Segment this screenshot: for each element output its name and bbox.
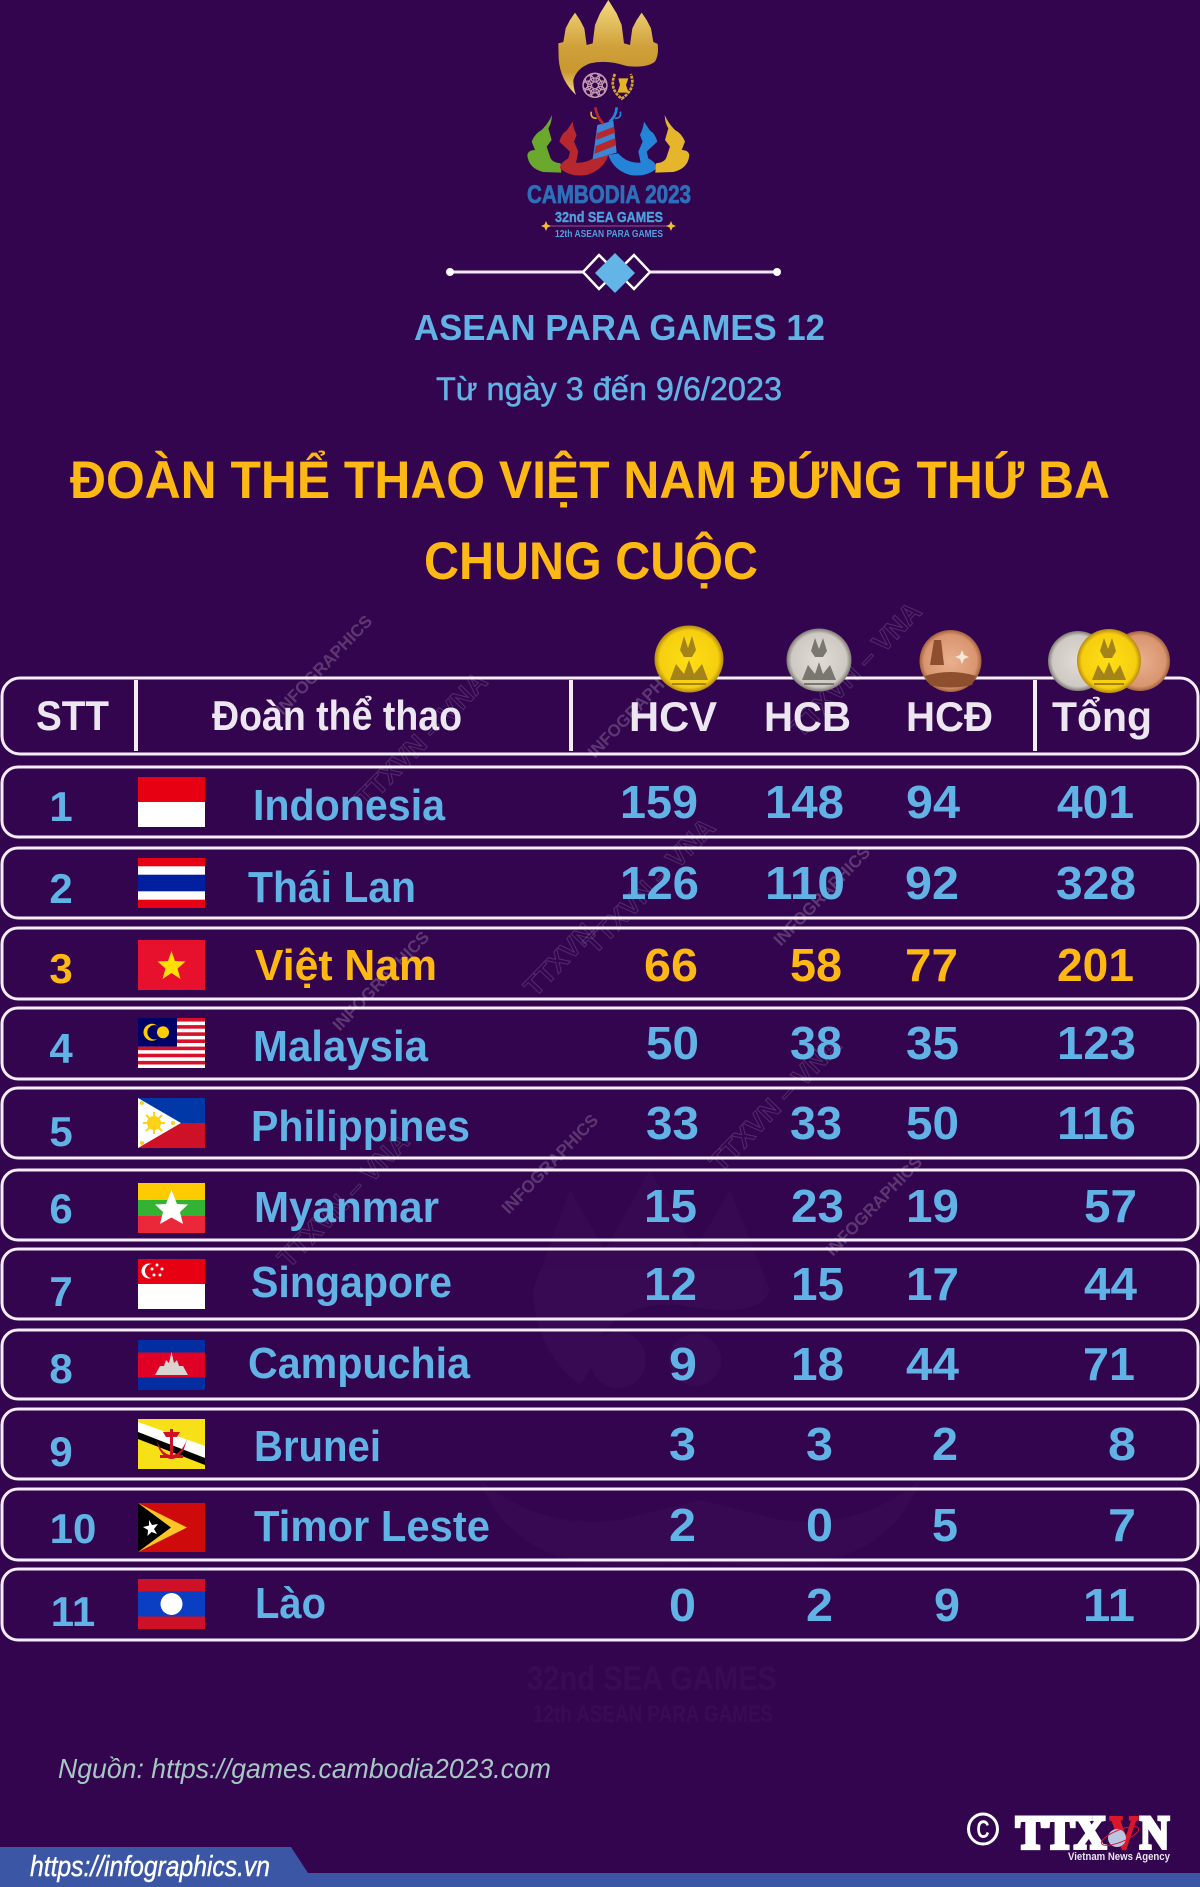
row 1: Indonesia: Indonesia xyxy=(253,781,445,830)
row 2: Thái Lan: 92 xyxy=(905,857,959,909)
watermark: agency marks: TTXVN – VNA xyxy=(578,812,721,959)
row 9: Brunei: Brunei xyxy=(254,1422,381,1471)
event logo xyxy=(527,0,691,240)
title xyxy=(70,449,1110,591)
source note: Nguồn: https://games.cambodia2023.com xyxy=(58,1753,551,1784)
title: ĐOÀN THỂ THAO VIỆT NAM ĐỨNG THỨ BA xyxy=(70,449,1110,510)
row 10: Timor Leste: 2 xyxy=(669,1499,696,1551)
row 1: Indonesia: 148 xyxy=(765,776,844,828)
row 5: Philippines: 50 xyxy=(906,1097,959,1149)
watermark: agency marks: INFOGRAPHICS xyxy=(329,928,433,1035)
row 10: Timor Leste xyxy=(2,1489,1198,1560)
flag: Thailand xyxy=(138,858,205,908)
row 9: Brunei: 2 xyxy=(932,1418,958,1470)
row 6: Myanmar: 15 xyxy=(644,1180,697,1232)
row 6: Myanmar: 19 xyxy=(906,1180,959,1232)
row 1: Indonesia: 401 xyxy=(1057,776,1134,828)
row 1: Indonesia xyxy=(2,767,1198,837)
watermark: faint games text: 32nd SEA GAMES xyxy=(527,1660,777,1698)
row 9: Brunei: 3 xyxy=(669,1418,696,1470)
icon: rosette emblem xyxy=(583,73,607,97)
row 5: Philippines: Philippines xyxy=(251,1102,470,1151)
row 5: Philippines xyxy=(2,1088,1198,1158)
watermark: faint games logo xyxy=(480,1170,920,1566)
watermark: agency marks: TTXVN – VNA xyxy=(704,1030,847,1177)
row 8: Campuchia xyxy=(2,1330,1198,1399)
logo divider with stars xyxy=(541,221,676,231)
watermark: agency marks: TTXVN xyxy=(518,917,601,1002)
row 6: Myanmar: 6 xyxy=(49,1185,73,1232)
row 5: Philippines: 116 xyxy=(1057,1097,1136,1149)
icon: gold medal xyxy=(654,626,724,692)
row 3: Việt Nam highlighted: 3 xyxy=(49,945,73,992)
watermark: agency marks: INFOGRAPHICS xyxy=(498,1111,602,1218)
row 3: Việt Nam highlighted: 66 xyxy=(644,939,698,991)
icon: gold crown xyxy=(527,0,689,175)
ornamental divider xyxy=(446,253,781,293)
watermark: agency marks: TTXVN – VNA xyxy=(272,1126,415,1273)
row 1: Indonesia: 159 xyxy=(620,776,698,828)
watermark: agency marks: TTXVN – VNA xyxy=(784,596,927,743)
icon: combined medals xyxy=(1048,629,1170,693)
row 6: Myanmar: 57 xyxy=(1084,1180,1137,1232)
row 7: Singapore: 17 xyxy=(906,1258,959,1310)
row 4: Malaysia: 35 xyxy=(906,1017,959,1069)
logo text: 32nd SEA Games: 32nd SEA GAMES xyxy=(555,209,663,226)
row 11: Lào: 9 xyxy=(934,1579,960,1631)
row 2: Thái Lan: 126 xyxy=(620,857,699,909)
event name: ASEAN PARA GAMES 12 xyxy=(414,307,825,348)
flag: Myanmar xyxy=(138,1183,205,1233)
icon: central twisted scarf xyxy=(591,107,621,159)
flag: Vietnam xyxy=(138,940,205,990)
column heading: HCĐ: HCĐ xyxy=(906,693,993,740)
icon: silver medal xyxy=(786,628,852,692)
row 2: Thái Lan: 2 xyxy=(49,865,73,912)
row 6: Myanmar: Myanmar xyxy=(254,1183,439,1232)
column dividers xyxy=(134,680,1037,751)
flag: Malaysia xyxy=(138,1018,205,1068)
row 6: Myanmar: 23 xyxy=(791,1180,844,1232)
logo text: 12th ASEAN Para Games: 12th ASEAN PARA GAMES xyxy=(555,229,663,240)
row 2: Thái Lan: 110 xyxy=(765,857,845,909)
watermark: agency marks xyxy=(272,596,927,1273)
row 9: Brunei xyxy=(2,1409,1198,1479)
icon: blue naga xyxy=(608,122,657,175)
flag: Philippines xyxy=(138,1098,205,1148)
footer url: https://infographics.vn xyxy=(30,1851,270,1883)
flag: Brunei xyxy=(138,1419,205,1469)
row 11: Lào: Lào xyxy=(255,1579,326,1628)
row 6: Myanmar xyxy=(2,1170,1198,1240)
row 8: Campuchia: Campuchia xyxy=(248,1339,470,1388)
row 3: Việt Nam highlighted: 58 xyxy=(790,939,842,991)
column heading: HCB: HCB xyxy=(764,693,851,740)
watermark: faint games text: 12th ASEAN PARA GAMES xyxy=(533,1701,773,1728)
icon: globe xyxy=(1099,1823,1141,1849)
footer band xyxy=(0,1847,1200,1887)
column heading: HCV: HCV xyxy=(629,693,717,740)
table header xyxy=(2,678,1198,754)
copyright symbol xyxy=(968,1814,998,1844)
logo text: Cambodia 2023: CAMBODIA 2023 xyxy=(527,181,691,209)
row 5: Philippines: 33 xyxy=(646,1097,699,1149)
row 7: Singapore xyxy=(2,1249,1198,1319)
event dates: Từ ngày 3 đến 9/6/2023 xyxy=(436,371,782,407)
row 7: Singapore: Singapore xyxy=(251,1258,452,1307)
flag: Cambodia xyxy=(138,1340,205,1390)
row 8: Campuchia: 44 xyxy=(906,1338,959,1390)
title: CHUNG CUỘC xyxy=(424,530,758,591)
row 4: Malaysia: 123 xyxy=(1057,1017,1136,1069)
row 3: Việt Nam highlighted xyxy=(2,928,1198,999)
row 7: Singapore: 12 xyxy=(644,1258,697,1310)
column heading: delegation: Đoàn thể thao xyxy=(212,692,462,739)
row 11: Lào: 2 xyxy=(806,1579,833,1631)
row 7: Singapore: 7 xyxy=(49,1268,73,1315)
row 9: Brunei: 3 xyxy=(806,1418,833,1470)
watermark: agency marks: INFOGRAPHICS xyxy=(770,843,874,950)
row 11: Lào: 11 xyxy=(51,1588,95,1635)
row 10: Timor Leste: Timor Leste xyxy=(254,1502,490,1551)
row 11: Lào xyxy=(2,1569,1198,1640)
row 4: Malaysia: 4 xyxy=(49,1025,73,1072)
row 9: Brunei: 9 xyxy=(49,1428,73,1475)
row 2: Thái Lan xyxy=(2,848,1198,918)
flag: Timor Leste xyxy=(138,1503,205,1552)
flag: Laos xyxy=(138,1579,205,1629)
TTXVN logo xyxy=(1016,1807,1171,1863)
watermark: faint games text xyxy=(527,1660,777,1728)
row 10: Timor Leste: 7 xyxy=(1108,1499,1136,1551)
row 8: Campuchia: 18 xyxy=(791,1338,844,1390)
copyright symbol: C xyxy=(976,1816,990,1844)
row 8: Campuchia: 9 xyxy=(669,1338,697,1390)
row 3: Việt Nam highlighted: 77 xyxy=(905,939,958,991)
watermark: agency marks: TTXVN – VNA xyxy=(350,666,493,813)
row 5: Philippines: 5 xyxy=(49,1108,73,1155)
row 3: Việt Nam highlighted: 201 xyxy=(1057,939,1134,991)
watermark: agency marks: INFOGRAPHICS xyxy=(584,655,688,762)
watermark: agency marks: INFOGRAPHICS xyxy=(272,612,376,719)
row 11: Lào: 0 xyxy=(669,1579,696,1631)
flag: Indonesia xyxy=(138,777,205,827)
row 8: Campuchia: 8 xyxy=(49,1345,73,1392)
TTXVN logo: N xyxy=(1140,1807,1169,1859)
row 4: Malaysia: 50 xyxy=(646,1017,699,1069)
row 8: Campuchia: 71 xyxy=(1083,1338,1135,1390)
row 5: Philippines: 33 xyxy=(790,1097,842,1149)
icon: green naga xyxy=(527,115,561,173)
icon: red naga xyxy=(559,122,608,175)
watermark: agency marks: INFOGRAPHICS xyxy=(822,1153,926,1260)
column heading: STT: STT xyxy=(36,692,109,739)
row 1: Indonesia: 94 xyxy=(906,776,960,828)
TTXVN logo: TTX xyxy=(1016,1807,1106,1859)
row 10: Timor Leste: 5 xyxy=(932,1499,958,1551)
row 1: Indonesia: 1 xyxy=(49,783,73,830)
row 10: Timor Leste: 10 xyxy=(50,1505,96,1552)
icon: bronze medal xyxy=(920,630,982,692)
row 3: Việt Nam highlighted: Việt Nam xyxy=(255,941,437,990)
icon: asean wreath emblem xyxy=(613,74,632,99)
row 9: Brunei: 8 xyxy=(1108,1418,1136,1470)
column heading: total: Tổng xyxy=(1052,693,1152,740)
flag: Singapore xyxy=(138,1259,205,1309)
row 4: Malaysia: 38 xyxy=(790,1017,842,1069)
row 2: Thái Lan: Thái Lan xyxy=(248,863,416,912)
row 2: Thái Lan: 328 xyxy=(1056,857,1136,909)
TTXVN logo: V xyxy=(1110,1807,1138,1859)
row 4: Malaysia xyxy=(2,1008,1198,1079)
logo caption: Vietnam News Agency xyxy=(1068,1851,1171,1863)
icon: yellow naga xyxy=(655,115,689,173)
row 4: Malaysia: Malaysia xyxy=(253,1022,428,1071)
row 11: Lào: 11 xyxy=(1083,1579,1135,1631)
row 7: Singapore: 15 xyxy=(791,1258,844,1310)
row 10: Timor Leste: 0 xyxy=(806,1499,833,1551)
row 7: Singapore: 44 xyxy=(1084,1258,1137,1310)
